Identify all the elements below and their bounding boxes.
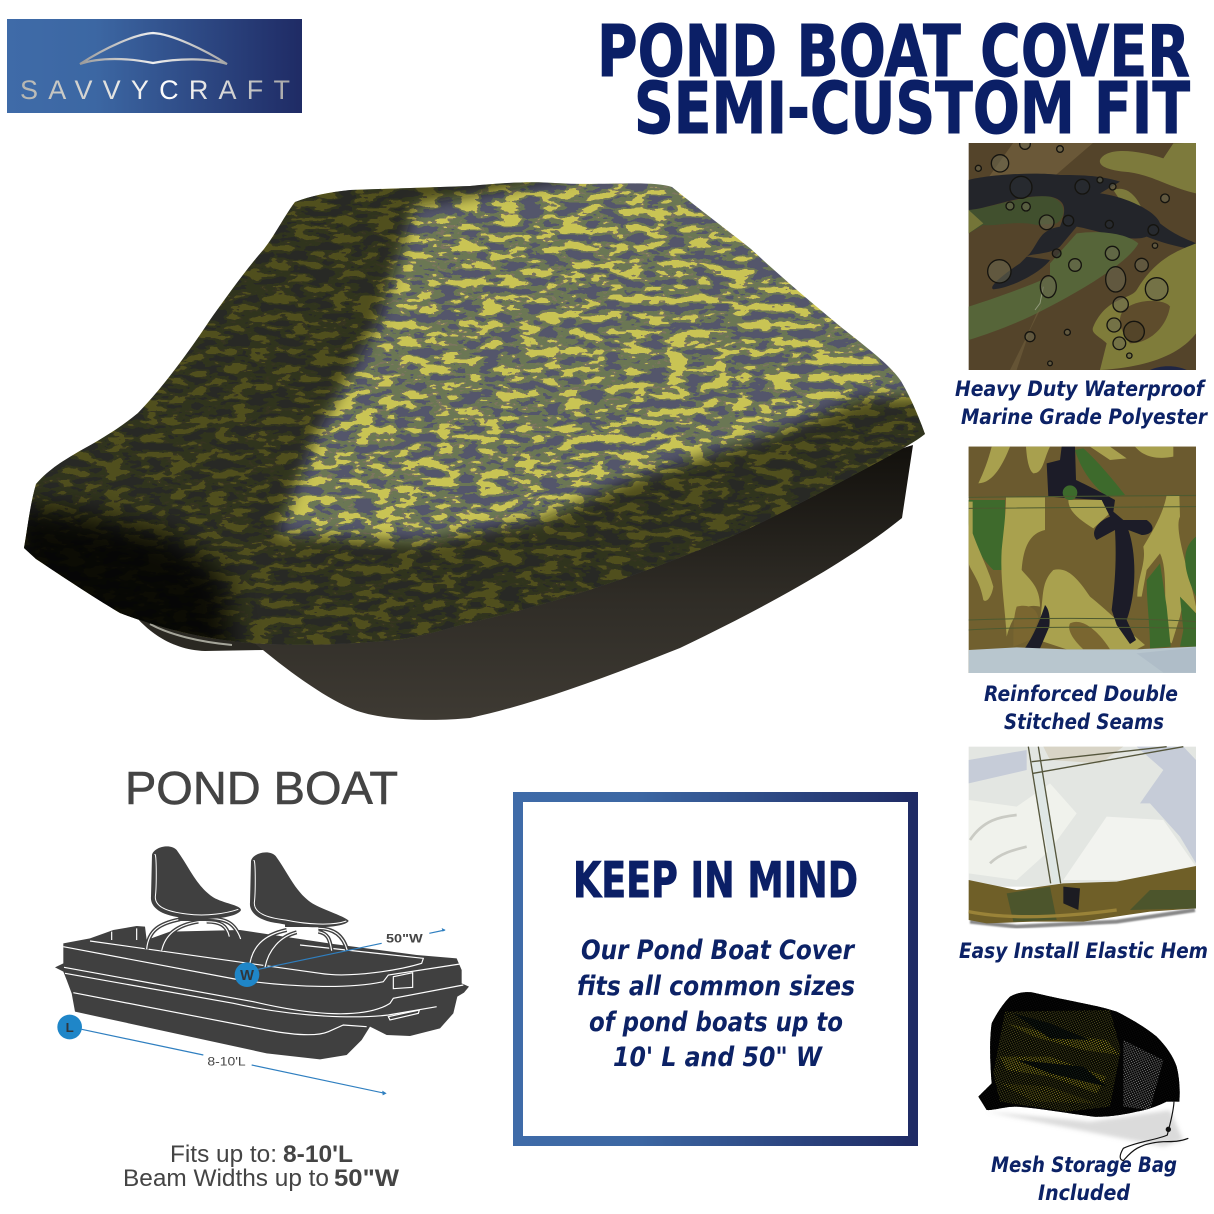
caption: storage bag: Mesh Storage Bag xyxy=(991,1153,1177,1178)
callout text: 10' L and 50" W xyxy=(613,1042,823,1073)
fit text: Beam Widths up to xyxy=(123,1165,329,1192)
logo: Savvycraft xyxy=(7,19,302,113)
hull xyxy=(55,926,469,1059)
width measure: W xyxy=(240,968,254,984)
product image: camouflage boat cover on pond boat xyxy=(24,182,925,720)
seat: rear xyxy=(151,846,241,921)
caption: storage bag xyxy=(991,1153,1177,1206)
caption: seams: Stitched Seams xyxy=(1004,710,1164,735)
callout text: fits all common sizes xyxy=(577,971,855,1002)
feature photo: double stitched seams xyxy=(969,447,1196,673)
fit text xyxy=(123,1141,399,1192)
callout text: of pond boats up to xyxy=(589,1007,843,1038)
camo cover xyxy=(24,182,925,645)
rear seat frame xyxy=(147,918,241,951)
illustration: pond boat xyxy=(55,846,469,1095)
width measure xyxy=(235,928,446,987)
callout heading: KEEP IN MIND xyxy=(573,852,858,909)
caption: waterproof xyxy=(955,377,1208,430)
feature photo: waterproof fabric xyxy=(969,139,1196,370)
boat diagram panel xyxy=(55,762,469,1192)
feature photo: mesh storage bag xyxy=(977,990,1188,1161)
callout text: Our Pond Boat Cover xyxy=(581,935,855,966)
callout text xyxy=(577,935,855,1073)
far pontoon xyxy=(132,612,265,651)
length measure: L xyxy=(66,1020,74,1035)
white hull lines xyxy=(63,928,463,1035)
title xyxy=(597,10,1190,150)
near hull xyxy=(245,445,913,720)
seat: front xyxy=(250,852,349,927)
fit text: 50"W xyxy=(334,1165,399,1192)
callout: keep in mind xyxy=(518,797,913,1141)
caption: storage bag: Included xyxy=(1038,1181,1131,1206)
front seat frame xyxy=(249,928,347,967)
caption: seams: Reinforced Double xyxy=(984,682,1178,707)
logo: Savvycraft: SAVVYCRAFT xyxy=(20,75,290,105)
caption: seams xyxy=(984,682,1178,735)
width measure: 50"W xyxy=(386,932,423,946)
length measure xyxy=(57,1015,387,1095)
heading: pond boat: POND BOAT xyxy=(125,762,398,814)
water droplets xyxy=(975,139,1169,366)
fit text: 8-10'L xyxy=(283,1141,353,1168)
length measure: 8-10'L xyxy=(207,1055,246,1069)
feature photo: elastic hem xyxy=(969,747,1196,927)
fit text: Fits up to: xyxy=(170,1141,277,1168)
